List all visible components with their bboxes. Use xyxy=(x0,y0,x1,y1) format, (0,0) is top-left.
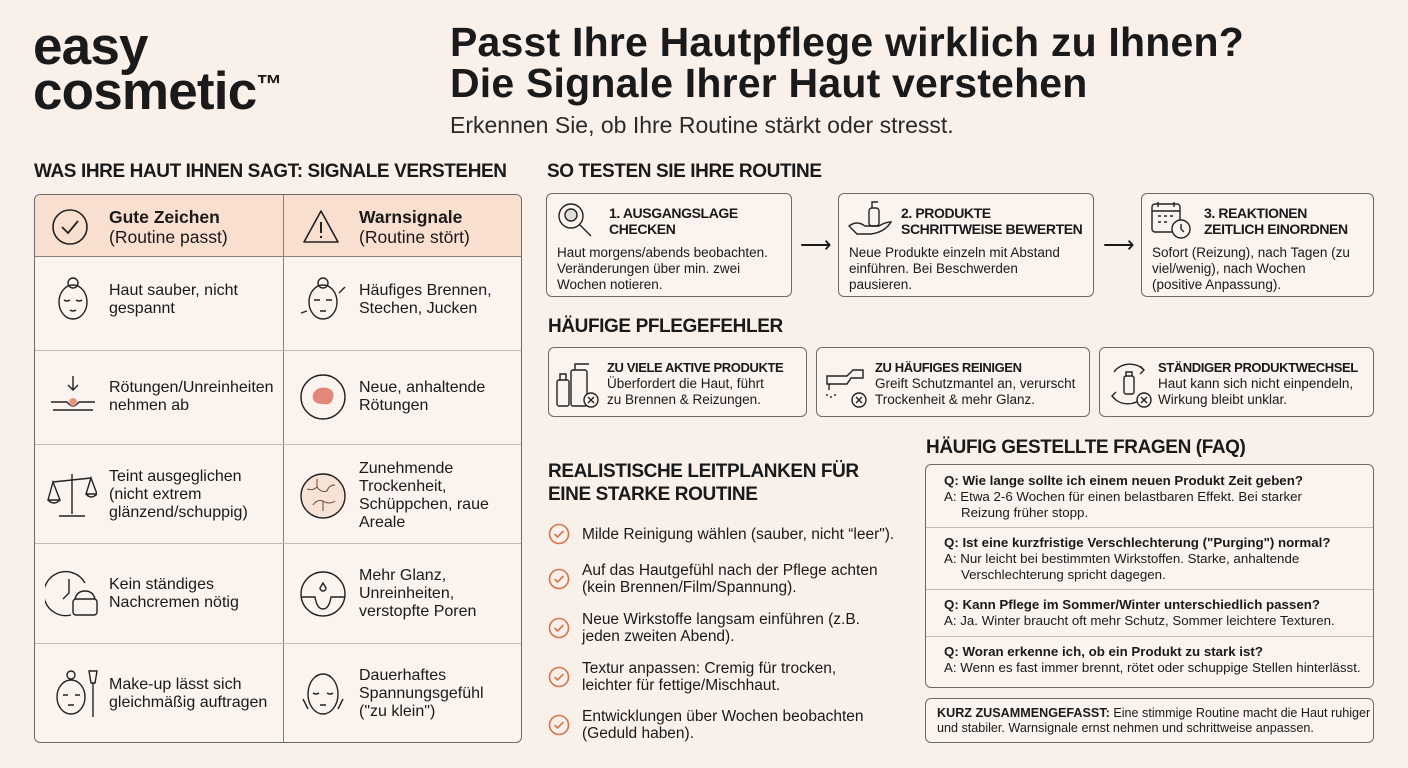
title: Passt Ihre Hautpflege wirklich zu Ihnen? xyxy=(450,19,1244,65)
panel: signals table: Stechen, Jucken xyxy=(359,300,477,317)
heading: common mistakes: HÄUFIGE PFLEGEFEHLER xyxy=(548,316,783,337)
header: warnings: Warnsignale xyxy=(359,207,462,227)
faq 4 xyxy=(944,644,1361,675)
header: warnings: (Routine stört) xyxy=(359,227,470,247)
row 4: Nachcremen nötig xyxy=(109,594,239,611)
mistake 3: Wirkung bleibt unklar. xyxy=(1158,392,1287,407)
row 5 xyxy=(56,670,267,717)
panel: signals table: Dauerhaftes xyxy=(359,667,446,684)
step 3: ZEITLICH EINORDNEN xyxy=(1204,221,1348,237)
item 4: leichter für fettige/Mischhaut. xyxy=(582,677,780,694)
row 2: Rötungen/Unreinheiten xyxy=(109,379,274,396)
faq 1: Q: Wie lange sollte ich einem neuen Produkt Zeit geben? xyxy=(944,473,1303,488)
step 1: CHECKEN xyxy=(609,221,675,237)
step 1: Veränderungen über min. zwei xyxy=(557,261,740,276)
panel: signals table: ("zu klein") xyxy=(359,703,435,720)
item 4 xyxy=(548,660,836,694)
item 3: jeden zweiten Abend). xyxy=(582,628,735,645)
mistake 3 xyxy=(1099,347,1374,417)
summary: KURZ ZUSAMMENGEFASST: Eine stimmige Routine macht die Haut ruhiger xyxy=(937,706,1370,720)
row 3 xyxy=(47,468,248,521)
faq 1: Reizung früher stopp. xyxy=(961,505,1088,520)
logo: easy xyxy=(33,17,148,76)
faq 3: A: Ja. Winter braucht oft mehr Schutz, Sommer leichtere Texturen. xyxy=(944,613,1335,628)
logo: cosmetic™ xyxy=(33,62,282,121)
panel: signals table: Unreinheiten, xyxy=(359,585,454,602)
panel: signals table: verstopfte Poren xyxy=(359,603,476,620)
mistake 1: Überfordert die Haut, führt xyxy=(607,376,764,391)
item 5: Entwicklungen über Wochen beobachten xyxy=(582,708,864,725)
row 5: Make-up lässt sich xyxy=(109,676,242,693)
mistake 3: Haut kann sich nicht einpendeln, xyxy=(1158,376,1353,391)
faq 1 xyxy=(944,473,1303,520)
step 3: 3. REAKTIONEN xyxy=(1204,205,1307,221)
faq 1: A: Etwa 2-6 Wochen für einen belastbaren Effekt. Bei starker xyxy=(944,489,1302,504)
step 1 xyxy=(546,193,792,297)
item 3: Neue Wirkstoffe langsam einführen (z.B. xyxy=(582,611,860,628)
row 1: gespannt xyxy=(109,300,175,317)
faq 3 xyxy=(944,597,1335,628)
step 1: 1. AUSGANGSLAGE xyxy=(609,205,738,221)
step 3: (positive Anpassung). xyxy=(1152,277,1281,292)
row 4: Kein ständiges xyxy=(109,576,214,593)
row 3: Teint ausgeglichen xyxy=(109,468,242,485)
faq 2 xyxy=(944,535,1330,582)
arrow 1: ⟶ xyxy=(800,232,832,257)
step 2: pausieren. xyxy=(849,277,912,292)
step 2: 2. PRODUKTE xyxy=(901,205,991,221)
header: good signs: (Routine passt) xyxy=(109,227,228,247)
row 4 xyxy=(45,570,239,616)
step 2: Neue Produkte einzeln mit Abstand xyxy=(849,245,1060,260)
row 1: Haut sauber, nicht xyxy=(109,282,238,299)
faq 2: Verschlechterung spricht dagegen. xyxy=(961,567,1166,582)
item 3 xyxy=(548,611,860,645)
mistake 3: STÄNDIGER PRODUKTWECHSEL xyxy=(1158,360,1358,375)
step 1: Haut morgens/abends beobachten. xyxy=(557,245,768,260)
step 3: viel/wenig), nach Wochen xyxy=(1152,261,1306,276)
panel: signals table xyxy=(34,194,522,743)
row 3: (nicht extrem xyxy=(109,486,201,503)
faq 2: A: Nur leicht bei bestimmten Wirkstoffen. Starke, anhaltende xyxy=(944,551,1299,566)
row 2: nehmen ab xyxy=(109,397,189,414)
panel: signals table: Trockenheit, xyxy=(359,478,446,495)
row 2 xyxy=(51,376,274,414)
heading: test routine: SO TESTEN SIE IHRE ROUTINE xyxy=(547,161,822,182)
mistake 2: Trockenheit & mehr Glanz. xyxy=(875,392,1035,407)
panel: signals table: Rötungen xyxy=(359,397,428,414)
heading: guardrails xyxy=(548,460,859,505)
panel: signals table: Zunehmende xyxy=(359,460,453,477)
step 2: SCHRITTWEISE BEWERTEN xyxy=(901,221,1082,237)
panel: signals table: Spannungsgefühl xyxy=(359,685,484,702)
mistake 2: Greift Schutzmantel an, verurscht xyxy=(875,376,1075,391)
item 2: (kein Brennen/Film/Spannung). xyxy=(582,579,797,596)
title xyxy=(450,19,1244,106)
panel: signals table: Areale xyxy=(359,514,405,531)
panel: signals table: Schüppchen, raue xyxy=(359,496,489,513)
step 3: Sofort (Reizung), nach Tagen (zu xyxy=(1152,245,1350,260)
step 2: einführen. Bei Beschwerden xyxy=(849,261,1018,276)
panel: signals table: Mehr Glanz, xyxy=(359,567,446,584)
item 5: (Geduld haben). xyxy=(582,725,694,742)
item 2 xyxy=(548,562,878,596)
panel: signals table: Häufiges Brennen, xyxy=(359,282,492,299)
heading: FAQ: HÄUFIG GESTELLTE FRAGEN (FAQ) xyxy=(926,437,1245,458)
mistake 1 xyxy=(548,347,807,417)
header: warnings xyxy=(303,207,470,247)
heading: guardrails: REALISTISCHE LEITPLANKEN FÜR xyxy=(548,461,859,482)
faq 4: Q: Woran erkenne ich, ob ein Produkt zu stark ist? xyxy=(944,644,1263,659)
faq 2: Q: Ist eine kurzfristige Verschlechterung ("Purging") normal? xyxy=(944,535,1330,550)
panel: FAQ xyxy=(925,464,1374,688)
row 1 xyxy=(58,277,238,320)
header: good signs: Gute Zeichen xyxy=(109,207,220,227)
row 5: gleichmäßig auftragen xyxy=(109,694,267,711)
checklist xyxy=(548,524,894,742)
item 4: Textur anpassen: Cremig für trocken, xyxy=(582,660,836,677)
title: Die Signale Ihrer Haut verstehen xyxy=(450,60,1088,106)
item 1: Milde Reinigung wählen (sauber, nicht “leer"). xyxy=(582,526,894,542)
logo xyxy=(33,17,282,121)
mistake 2: ZU HÄUFIGES REINIGEN xyxy=(875,360,1022,375)
header: good signs xyxy=(52,207,228,247)
step 2 xyxy=(838,193,1094,297)
mistake 1: zu Brennen & Reizungen. xyxy=(607,392,761,407)
heading: signals: WAS IHRE HAUT IHNEN SAGT: SIGNALE VERSTEHEN xyxy=(34,161,507,182)
arrow 2: ⟶ xyxy=(1103,232,1135,257)
summary xyxy=(925,698,1374,743)
heading: guardrails: EINE STARKE ROUTINE xyxy=(548,484,758,505)
mistake 1: ZU VIELE AKTIVE PRODUKTE xyxy=(607,360,783,375)
step 3 xyxy=(1141,193,1374,297)
mistake 2 xyxy=(816,347,1090,417)
step 1: Wochen notieren. xyxy=(557,277,663,292)
summary: und stabiler. Warnsignale ernst nehmen und schrittweise anpassen. xyxy=(937,721,1314,735)
faq 3: Q: Kann Pflege im Sommer/Winter unterschiedlich passen? xyxy=(944,597,1320,612)
faq 4: A: Wenn es fast immer brennt, rötet oder schuppige Stellen hinterlässt. xyxy=(944,660,1361,675)
panel: signals table: Neue, anhaltende xyxy=(359,379,485,396)
item 5 xyxy=(548,708,864,742)
row 3: glänzend/schuppig) xyxy=(109,504,248,521)
subtitle: Erkennen Sie, ob Ihre Routine stärkt oder stresst. xyxy=(450,112,954,138)
item 2: Auf das Hautgefühl nach der Pflege achten xyxy=(582,562,878,579)
